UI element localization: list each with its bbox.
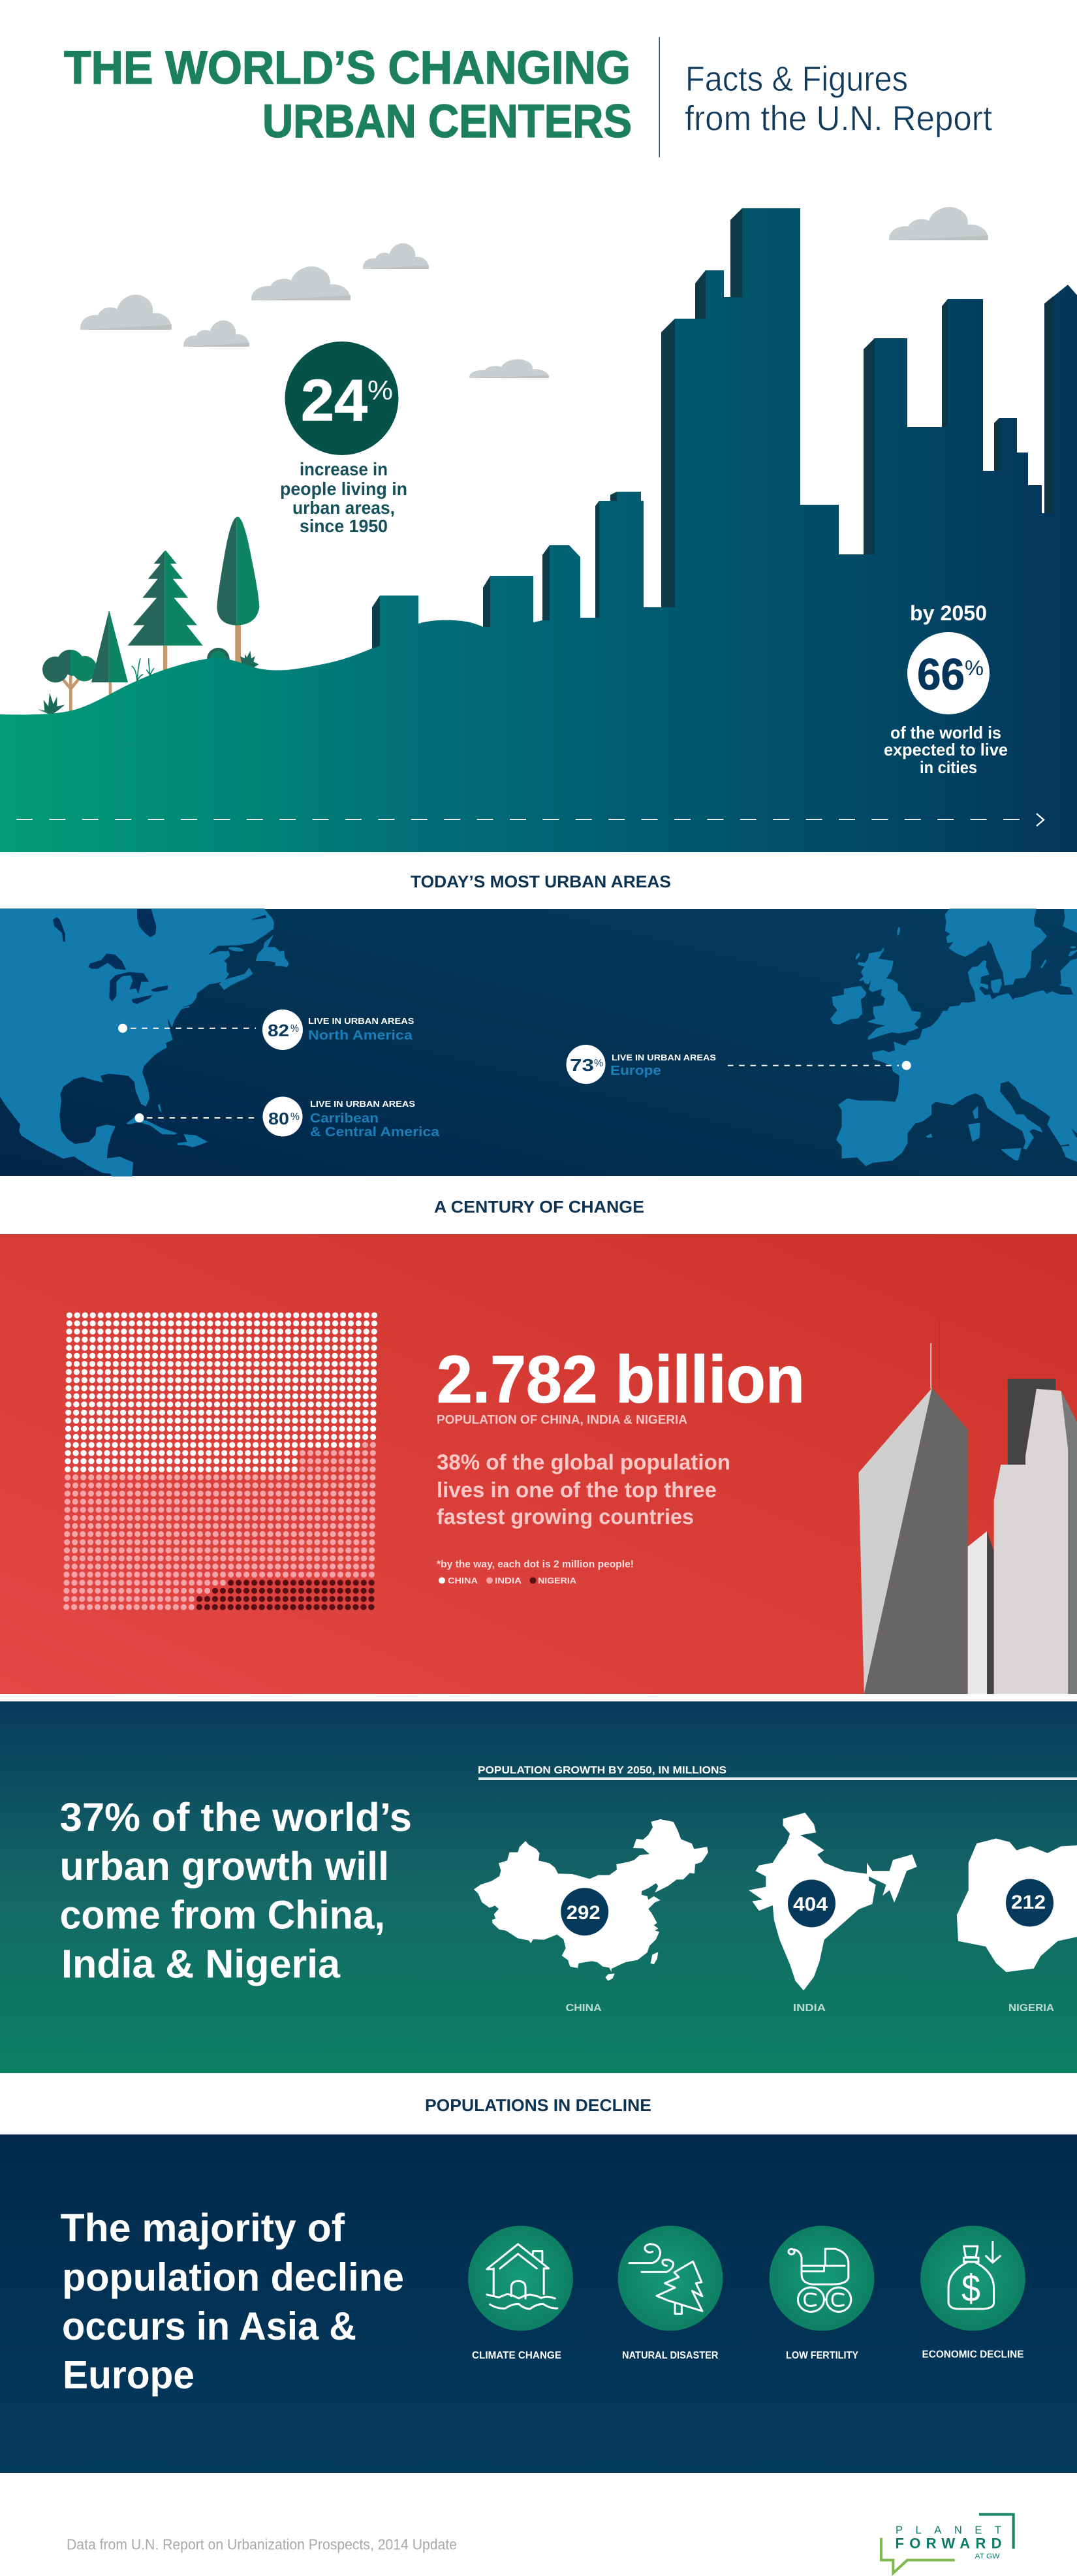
- legend: INDIA: [495, 1576, 522, 1585]
- stat: 66 percent by 2050: of the world is: [890, 723, 1001, 742]
- icon: economic decline: ECONOMIC DECLINE: [922, 2349, 1024, 2360]
- callout: europe: Europe: [610, 1064, 661, 1078]
- body text: 38% of the global population: [437, 1450, 730, 1474]
- stat: 24 percent: 24: [301, 368, 367, 434]
- callout: caribbean and central america: Carribean: [310, 1111, 379, 1126]
- body text: [437, 1450, 730, 1529]
- body text: lives in one of the top three: [437, 1478, 717, 1502]
- subtitle: Facts & Figures: [685, 59, 908, 99]
- callout: north america: North America: [308, 1028, 413, 1043]
- icon: economic decline: $: [961, 2267, 980, 2310]
- map: europe: [831, 909, 1077, 1166]
- icon: low fertility: LOW FERTILITY: [786, 2350, 858, 2361]
- subtitle: from the U.N. Report: [685, 99, 992, 138]
- panel: urban growth: [0, 1702, 1077, 2073]
- stat: 66 percent by 2050: by 2050: [910, 601, 987, 625]
- map: nigeria: 212: [1011, 1892, 1046, 1913]
- panel: population of china india nigeria: [0, 1234, 1077, 1694]
- headline: population decline: [62, 2255, 404, 2299]
- headline: India & Nigeria: [61, 1942, 341, 1986]
- headline: The majority of: [60, 2206, 345, 2250]
- callout: north america: LIVE IN URBAN AREAS: [308, 1017, 414, 1026]
- map: nigeria: [957, 1839, 1077, 2014]
- logo: planet forward: [881, 2515, 1014, 2573]
- callout: north america: [118, 1010, 414, 1050]
- title: URBAN CENTERS: [262, 96, 632, 148]
- stat: 24 percent: [280, 342, 407, 536]
- subtitle: [685, 59, 992, 138]
- panel: population decline: [0, 2135, 1077, 2473]
- icon: natural disaster: NATURAL DISASTER: [622, 2350, 719, 2361]
- headline: occurs in Asia &: [62, 2304, 356, 2348]
- stat: 66 percent by 2050: 66: [917, 650, 965, 699]
- trees and shrubs: [37, 517, 259, 715]
- headline: 37% of the world’s: [60, 1795, 412, 1839]
- map: north america: [0, 909, 289, 1176]
- stat: 24 percent: %: [367, 375, 393, 405]
- cloud: [889, 207, 988, 240]
- dot chart: each dot is 2 million people: [67, 1315, 375, 1607]
- sublabel: POPULATION OF CHINA, INDIA & NIGERIA: [437, 1413, 687, 1427]
- legend: CHINA: [448, 1576, 478, 1585]
- stat: 24 percent: people living in: [280, 479, 407, 499]
- cloud: [80, 294, 172, 330]
- legend: [439, 1576, 577, 1585]
- callout: north america: %: [290, 1023, 299, 1034]
- chart heading: [478, 1765, 1077, 1780]
- title: [64, 42, 632, 148]
- callout: europe: LIVE IN URBAN AREAS: [612, 1053, 716, 1062]
- logo: planet forward: AT GW: [975, 2552, 1000, 2560]
- cloud: [363, 244, 429, 269]
- body text: fastest growing countries: [437, 1504, 694, 1529]
- map: china: [474, 1819, 708, 2014]
- icon: low fertility: [770, 2226, 874, 2361]
- icon: economic decline: [920, 2226, 1025, 2360]
- icon: climate change: [468, 2226, 573, 2361]
- cloud: [183, 321, 249, 347]
- stat: 24 percent: since 1950: [300, 516, 388, 536]
- callout: caribbean and central america: %: [290, 1111, 300, 1122]
- icon: natural disaster: [618, 2226, 723, 2361]
- chart heading: POPULATION GROWTH BY 2050, IN MILLIONS: [478, 1765, 726, 1776]
- map: nigeria: NIGERIA: [1008, 2003, 1054, 2014]
- callout: caribbean and central america: [134, 1097, 440, 1139]
- illustration: skyscrapers: [858, 1317, 1077, 1694]
- callout: north america: 82: [268, 1021, 289, 1040]
- headline: Europe: [63, 2353, 195, 2396]
- callout: europe: 73: [570, 1055, 594, 1075]
- headline: come from China,: [60, 1892, 385, 1937]
- title: THE WORLD’S CHANGING: [64, 42, 631, 94]
- source note: Data from U.N. Report on Urbanization Prospects, 2014 Update: [67, 2536, 457, 2553]
- map: china: 292: [567, 1902, 601, 1924]
- cloud: [251, 266, 351, 300]
- logo: planet forward: PLANET: [896, 2524, 1001, 2536]
- headline number: 2.782 billion: [437, 1343, 805, 1417]
- cloud: [469, 359, 549, 378]
- map: india: [749, 1813, 917, 2014]
- logo: planet forward: FORWARD: [896, 2535, 1001, 2552]
- legend: NIGERIA: [538, 1576, 577, 1585]
- icon: climate change: CLIMATE CHANGE: [472, 2350, 561, 2361]
- note: *by the way, each dot is 2 million people!: [437, 1559, 634, 1570]
- callout: caribbean and central america: & Central America: [310, 1125, 440, 1139]
- map: india: 404: [793, 1894, 828, 1915]
- panel: hero skyline and hill: [0, 208, 1077, 852]
- stat: 66 percent by 2050: %: [965, 656, 984, 680]
- headline: urban growth will: [60, 1844, 389, 1888]
- arrow: timeline: [16, 814, 1044, 826]
- heading: populations in decline: POPULATIONS IN DECLINE: [425, 2095, 651, 2115]
- map: india: INDIA: [793, 2003, 826, 2014]
- headline: [60, 2206, 404, 2396]
- stat: 66 percent by 2050: expected to live: [884, 740, 1008, 759]
- stat: 24 percent: urban areas,: [292, 498, 395, 518]
- callout: caribbean and central america: LIVE IN URBAN AREAS: [310, 1100, 415, 1109]
- panel: map: [0, 909, 1077, 1176]
- heading: today's most urban areas: TODAY’S MOST URBAN AREAS: [411, 872, 671, 891]
- callout: caribbean and central america: 80: [268, 1109, 289, 1128]
- callout: europe: [567, 1045, 911, 1084]
- stat: 24 percent: increase in: [300, 459, 388, 479]
- callout: europe: %: [594, 1058, 603, 1069]
- stat: 66 percent by 2050: [884, 601, 1008, 777]
- heading: a century of change: A CENTURY OF CHANGE: [434, 1197, 644, 1216]
- stat: 66 percent by 2050: in cities: [920, 757, 977, 777]
- headline: [60, 1795, 412, 1986]
- map: china: CHINA: [566, 2003, 602, 2014]
